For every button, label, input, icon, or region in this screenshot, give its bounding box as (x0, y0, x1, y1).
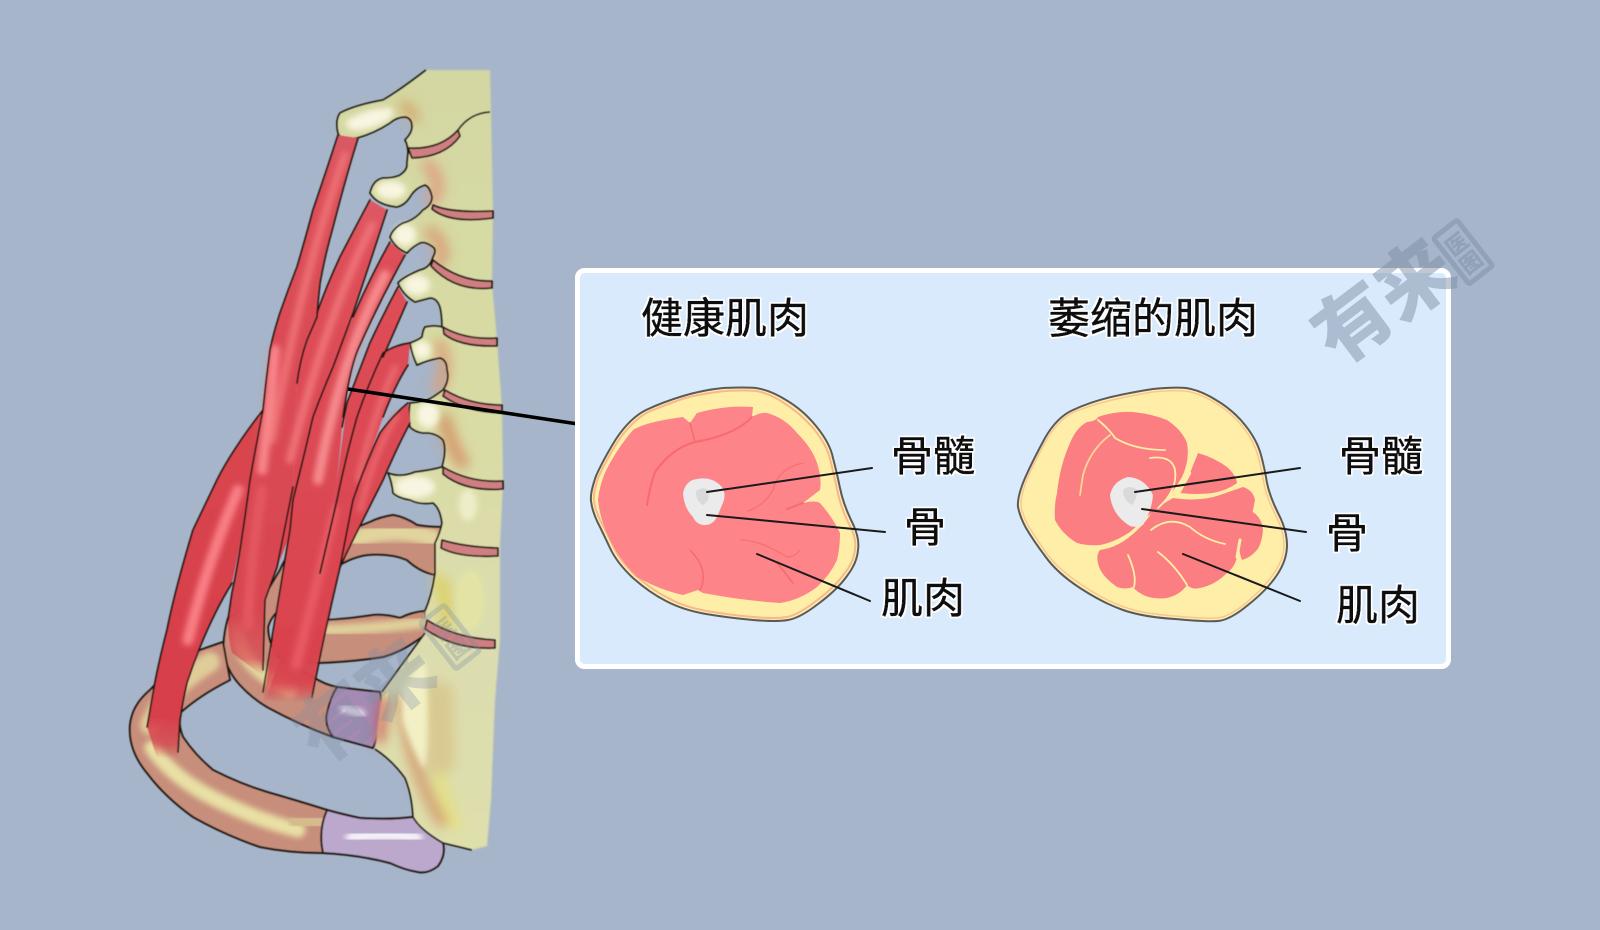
muscle: process 4 bundle (320, 287, 407, 573)
muscle: process 6 bundle (265, 403, 410, 702)
label: bone: 骨 (1326, 510, 1368, 557)
atrophied muscle: small oval (1239, 512, 1263, 560)
atrophied muscle cross-section (1018, 388, 1423, 629)
label lines (1135, 468, 1306, 601)
heading: healthy muscle: 健康肌肉 (641, 295, 809, 342)
costal cartilage (lower) (321, 810, 444, 872)
muscle: process 3 bundle (263, 242, 405, 702)
panel: cross-sections (578, 270, 1448, 666)
watermark: upper right: 医 (1441, 228, 1474, 261)
healthy bone (683, 478, 724, 525)
healthy muscle cross-section (591, 388, 975, 622)
label: muscle: 肌肉 (881, 575, 965, 622)
process highlights (345, 108, 484, 770)
watermark: lower left: 图 (442, 631, 475, 664)
watermark: upper right: 有 (1298, 267, 1410, 381)
spine shading (380, 105, 462, 825)
atrophied muscle: lower block (1097, 487, 1255, 598)
label: bone: 骨 (904, 504, 946, 551)
muscle: top long bundle (228, 135, 358, 676)
healthy bone marrow (696, 488, 709, 505)
watermark: lower left (280, 605, 480, 780)
muscle: process 2 bundle (277, 200, 387, 567)
label: muscle: 肌肉 (1336, 582, 1420, 629)
healthy muscle mass (598, 407, 840, 603)
fascia lines (1080, 420, 1240, 587)
watermark: lower left: 来 (340, 624, 452, 738)
watermark: upper right: 图 (1455, 246, 1488, 279)
muscles (147, 135, 410, 758)
ribs (130, 515, 442, 853)
watermark: lower left: 医 (428, 613, 461, 646)
atrophied muscle: upper right block (1180, 453, 1237, 494)
watermark: upper right (1298, 220, 1493, 381)
watermark: lower left: 有 (280, 666, 392, 780)
rib highlights (150, 532, 432, 830)
heading: atrophied muscle: 萎缩的肌肉 (1048, 295, 1258, 342)
label lines (707, 468, 885, 601)
atrophied muscle: left block (1055, 412, 1188, 545)
spine column (337, 70, 503, 850)
label: marrow: 骨髓 (1339, 433, 1423, 480)
muscle: far left bundle (147, 410, 263, 758)
atrophied bone (1110, 477, 1153, 527)
spine outline (337, 70, 490, 850)
muscle fibre highlights (188, 155, 397, 665)
muscle: process 5 bundle (320, 343, 410, 600)
muscle outlines (147, 135, 410, 752)
atrophied marrow (1123, 487, 1137, 505)
illustration: thoracic spine, ribs and muscles (130, 70, 503, 872)
costal cartilage (upper) (326, 687, 383, 748)
healthy muscle fascia lines (647, 417, 803, 590)
label: marrow: 骨髓 (891, 433, 975, 480)
watermark: upper right: 来 (1360, 224, 1472, 338)
pointer line from muscle to panel (348, 389, 578, 424)
intervertebral discs (408, 130, 503, 648)
